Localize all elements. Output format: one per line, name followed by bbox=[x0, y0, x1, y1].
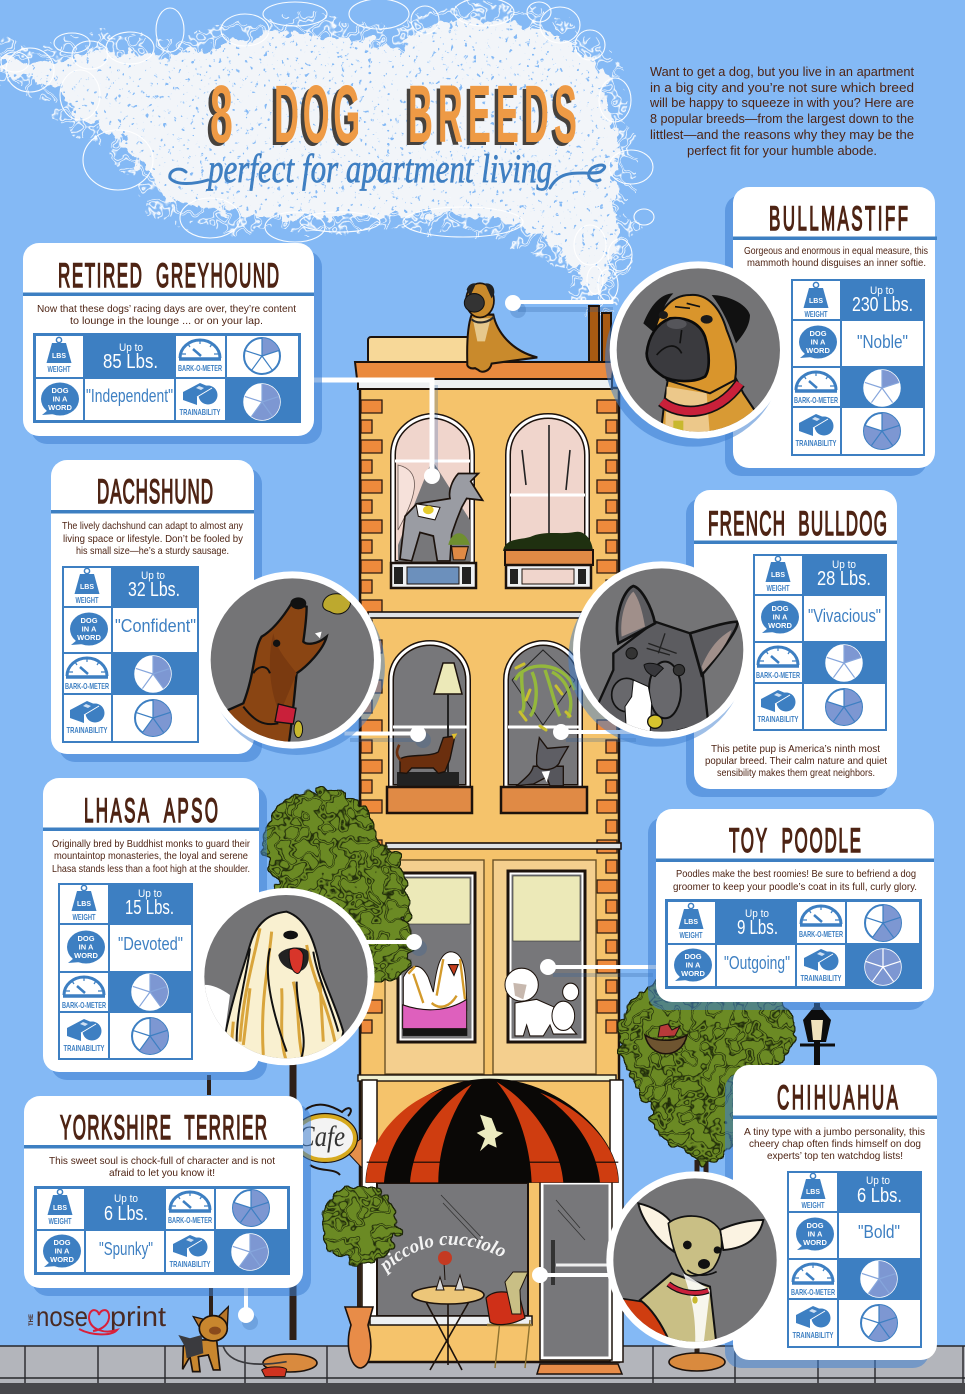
stats table bbox=[62, 566, 199, 743]
dog in a word: DOG bbox=[51, 386, 69, 395]
bark-o-meter bbox=[62, 977, 106, 1010]
heading: LHASA APSO bbox=[84, 792, 218, 830]
dog in a word: WORD bbox=[74, 951, 98, 960]
weight: LBS bbox=[80, 582, 94, 591]
word: "Devoted" bbox=[118, 934, 183, 954]
trainability pie bbox=[864, 413, 900, 449]
dog in a word bbox=[67, 930, 105, 964]
trainability pie bbox=[132, 1018, 168, 1054]
bark-o-meter: BARK-O-METER bbox=[168, 1215, 212, 1225]
up to bbox=[852, 285, 913, 316]
window: dachshund bbox=[387, 643, 472, 813]
trainability: TRAINABILITY bbox=[800, 973, 842, 983]
connector: bullmastiff bbox=[506, 296, 613, 318]
weight: LBS bbox=[771, 570, 785, 579]
weight: WEIGHT bbox=[48, 364, 71, 374]
bark pie bbox=[244, 338, 280, 374]
weight: WEIGHT bbox=[802, 1200, 825, 1210]
trainability pie bbox=[861, 1305, 897, 1341]
description: Lhasa stands less than a foot high at the shoulder. bbox=[52, 863, 250, 875]
shopfront: piccolo cucciolo bbox=[381, 1236, 505, 1276]
dog in a word: IN A bbox=[811, 338, 826, 346]
weight bbox=[678, 903, 704, 940]
bark pie bbox=[132, 974, 168, 1010]
up to bbox=[128, 570, 180, 601]
word: "Spunky" bbox=[99, 1239, 153, 1259]
logo: the nose print: nose bbox=[36, 1301, 88, 1332]
dog bowl bbox=[262, 1367, 287, 1377]
logo: the nose print: print bbox=[110, 1301, 166, 1332]
dog in a word: DOG bbox=[771, 604, 789, 613]
yorkshire terrier on sidewalk bbox=[178, 1307, 287, 1377]
description: The lively dachshund can adapt to almost any bbox=[62, 520, 244, 532]
stats table bbox=[753, 554, 887, 731]
up to bbox=[104, 1193, 148, 1225]
title: DOG bbox=[274, 69, 360, 160]
portrait: french bulldog bbox=[568, 560, 750, 747]
chair with chihuahua and red bag bbox=[486, 1272, 532, 1368]
roof parapet and chimneys bbox=[368, 306, 611, 363]
description: cheery chap often finds himself on dog bbox=[749, 1138, 921, 1150]
logo: the nose print bbox=[29, 1301, 166, 1334]
trainability bbox=[792, 1306, 834, 1340]
up to bbox=[817, 559, 871, 590]
trainability pie bbox=[865, 949, 901, 985]
weight: LBS bbox=[684, 917, 698, 926]
weight: WEIGHT bbox=[48, 1216, 72, 1226]
weight bbox=[800, 1173, 826, 1210]
heading: TOY POODLE bbox=[729, 822, 861, 860]
up to: Up to bbox=[141, 570, 165, 582]
intro text: perfect fit for your humble abode. bbox=[687, 143, 877, 158]
bark-o-meter bbox=[799, 906, 843, 939]
description bbox=[49, 1155, 275, 1179]
bark-o-meter: BARK-O-METER bbox=[799, 929, 843, 939]
cafe sign: Cafe bbox=[298, 1120, 345, 1153]
description: This sweet soul is chock-full of character and is not bbox=[49, 1155, 275, 1167]
description: Poodles make the best roomies! Be sure to befriend a dog bbox=[676, 868, 916, 880]
title: BREEDS bbox=[408, 69, 577, 160]
portrait: bullmastiff bbox=[605, 260, 790, 447]
tree trunks and poles bbox=[209, 1003, 817, 1365]
up to: Up to bbox=[138, 888, 162, 900]
bark-o-meter bbox=[794, 372, 838, 405]
connector: french bulldog bbox=[554, 724, 641, 742]
upper-floor panels bbox=[385, 860, 596, 1074]
shop door bbox=[540, 1181, 612, 1360]
description: mountaintop monasteries, the loyal and serene bbox=[54, 850, 248, 862]
description: living space or lifestyle. Don’t be fooled by bbox=[63, 533, 244, 545]
up to: Up to bbox=[119, 342, 143, 354]
dog in a word bbox=[761, 600, 799, 634]
intro text: littlest—and the reasons why they may be the bbox=[650, 127, 914, 142]
tree: left bbox=[264, 789, 414, 984]
portrait: chihuahua bbox=[606, 1171, 787, 1353]
description bbox=[705, 743, 887, 779]
trainability bbox=[800, 949, 842, 983]
stats table bbox=[665, 899, 922, 989]
weight: LBS bbox=[77, 899, 91, 908]
weight: LBS bbox=[806, 1187, 820, 1196]
up to: 32 Lbs. bbox=[128, 579, 180, 601]
trainability bbox=[170, 1235, 211, 1269]
weight: WEIGHT bbox=[804, 309, 828, 319]
bark-o-meter bbox=[791, 1264, 835, 1297]
dog in a word: DOG bbox=[684, 952, 702, 961]
description bbox=[744, 1126, 925, 1162]
weight: LBS bbox=[53, 1203, 67, 1212]
bark-o-meter: BARK-O-METER bbox=[791, 1287, 835, 1297]
dog in a word bbox=[43, 1234, 81, 1268]
dog in a word: IN A bbox=[808, 1230, 823, 1238]
intro text bbox=[649, 64, 914, 158]
bark pie bbox=[135, 656, 171, 692]
description: This petite pup is America’s ninth most bbox=[711, 743, 880, 755]
description: afraid to let you know it! bbox=[109, 1167, 215, 1179]
panel: retired greyhound bbox=[23, 243, 322, 444]
description: to lounge in the lounge ... or on your lap. bbox=[70, 315, 263, 327]
up to: 6 Lbs. bbox=[104, 1203, 148, 1225]
trainability bbox=[66, 701, 108, 735]
up to: 6 Lbs. bbox=[857, 1185, 902, 1207]
window: lhasa apso bbox=[398, 873, 475, 1042]
weight bbox=[804, 282, 828, 319]
up to bbox=[103, 342, 158, 373]
heading: YORKSHIRE TERRIER bbox=[60, 1109, 267, 1147]
description bbox=[37, 303, 296, 327]
dog in a word: DOG bbox=[806, 1221, 824, 1230]
dog in a word: IN A bbox=[55, 1246, 70, 1256]
description: groomer to keep your poodle’s coat in its full, curly glory. bbox=[673, 881, 917, 893]
dog in a word: WORD bbox=[803, 1238, 827, 1247]
panel: bullmastiff bbox=[725, 187, 937, 476]
bark-o-meter bbox=[756, 647, 800, 680]
dog in a word bbox=[70, 612, 108, 646]
bark-o-meter: BARK-O-METER bbox=[756, 670, 800, 680]
intro text: 8 popular breeds—from the largest down to the bbox=[650, 111, 914, 126]
heading: BULLMASTIFF bbox=[769, 200, 908, 238]
floor ledges bbox=[368, 612, 621, 849]
weight: WEIGHT bbox=[680, 930, 703, 940]
description: Now that these dogs’ racing days are over, they’re content bbox=[37, 303, 296, 315]
panel: yorkshire terrier bbox=[24, 1096, 311, 1296]
weight: WEIGHT bbox=[72, 912, 96, 922]
weight bbox=[48, 1189, 72, 1226]
up to: Up to bbox=[114, 1193, 138, 1205]
dog in a word: DOG bbox=[77, 934, 95, 943]
connector: chihuahua bbox=[532, 1268, 615, 1282]
intro text: in a big city and you’re not sure which breed bbox=[650, 80, 914, 95]
panel: dachshund bbox=[51, 460, 262, 762]
up to bbox=[737, 908, 778, 939]
up to: Up to bbox=[832, 559, 856, 571]
bark pie bbox=[826, 645, 862, 681]
word: "Vivacious" bbox=[808, 606, 881, 626]
up to: Up to bbox=[866, 1175, 890, 1187]
heading: FRENCH BULLDOG bbox=[708, 505, 887, 543]
connector: dachshund bbox=[345, 726, 431, 748]
description: Gorgeous and enormous in equal measure, this bbox=[744, 245, 928, 257]
up to: 28 Lbs. bbox=[817, 568, 871, 590]
panel: chihuahua bbox=[725, 1065, 937, 1368]
dog in a word: IN A bbox=[82, 624, 97, 634]
dog in a word bbox=[674, 948, 712, 982]
dachshund in window bbox=[397, 733, 457, 773]
weight bbox=[766, 556, 790, 593]
shop window bbox=[377, 1183, 528, 1316]
connector: toy poodle bbox=[540, 960, 658, 977]
up to: 15 Lbs. bbox=[125, 897, 174, 919]
word: "Independent" bbox=[86, 386, 173, 406]
weight bbox=[72, 885, 96, 922]
stats table bbox=[58, 883, 193, 1060]
description bbox=[744, 245, 928, 269]
dog in a word: IN A bbox=[53, 394, 68, 404]
striped awning bbox=[366, 1079, 618, 1182]
up to: Up to bbox=[870, 285, 894, 297]
weight bbox=[74, 568, 100, 605]
bark pie bbox=[233, 1190, 269, 1226]
bark-o-meter: BARK-O-METER bbox=[62, 1000, 106, 1010]
connector: lhasa apso bbox=[360, 934, 427, 956]
trainability bbox=[758, 690, 799, 724]
up to bbox=[857, 1175, 902, 1207]
bark-o-meter bbox=[178, 340, 222, 373]
description: his small size—he’s a sturdy sausage. bbox=[76, 545, 229, 557]
cafe table bbox=[412, 1251, 484, 1370]
weight: LBS bbox=[809, 296, 823, 305]
word: "Bold" bbox=[858, 1222, 900, 1242]
stats table bbox=[791, 279, 925, 456]
dog in a word: WORD bbox=[48, 403, 72, 412]
weight: LBS bbox=[52, 351, 66, 360]
window: greyhound bbox=[391, 416, 476, 588]
trainability: TRAINABILITY bbox=[64, 1043, 105, 1053]
bark pie bbox=[861, 1261, 897, 1297]
sidewalk bbox=[0, 1346, 965, 1394]
description: A tiny type with a jumbo personality, this bbox=[744, 1126, 925, 1138]
tree base planters bbox=[263, 1353, 725, 1372]
word: "Outgoing" bbox=[724, 953, 790, 973]
bark-o-meter: BARK-O-METER bbox=[65, 681, 109, 691]
roof cornice bbox=[355, 362, 614, 389]
stats table bbox=[34, 1186, 290, 1275]
description: mammoth hound disguises an inner softie. bbox=[747, 257, 926, 269]
heading: RETIRED GREYHOUND bbox=[58, 257, 279, 295]
bark-o-meter: BARK-O-METER bbox=[794, 395, 838, 405]
apartment building bbox=[354, 305, 624, 1375]
bark-o-meter bbox=[65, 658, 109, 691]
dog in a word: IN A bbox=[773, 612, 788, 622]
subtitle: perfect for apartment living bbox=[206, 146, 552, 191]
trainability: TRAINABILITY bbox=[758, 714, 799, 724]
weight: WEIGHT bbox=[766, 583, 790, 593]
topiary and pot bbox=[322, 1187, 398, 1368]
poodle in window bbox=[505, 968, 579, 1036]
up to: 230 Lbs. bbox=[852, 294, 913, 316]
dog in a word: WORD bbox=[806, 346, 830, 355]
trainability: TRAINABILITY bbox=[796, 438, 837, 448]
french bulldog in window bbox=[517, 738, 568, 786]
dog in a word: WORD bbox=[681, 969, 705, 978]
dog in a word bbox=[799, 326, 837, 358]
bark-o-meter: BARK-O-METER bbox=[178, 363, 222, 373]
weight bbox=[46, 337, 72, 374]
intro text: will be happy to squeeze in with you? Here are bbox=[649, 95, 914, 110]
title: 8 bbox=[210, 67, 233, 160]
description: sensibility makes them great neighbors. bbox=[717, 767, 875, 779]
cream ledge bbox=[358, 1075, 616, 1081]
bark pie bbox=[865, 905, 901, 941]
dog in a word: DOG bbox=[80, 616, 98, 625]
up to: 85 Lbs. bbox=[103, 351, 158, 373]
word: "Confident" bbox=[115, 616, 196, 636]
shopfront bbox=[361, 1079, 624, 1375]
portrait: dachshund bbox=[204, 571, 385, 755]
building wall bbox=[360, 388, 619, 1362]
dog in a word: IN A bbox=[79, 942, 94, 952]
window: toy poodle bbox=[508, 871, 585, 1042]
dog in a word: WORD bbox=[50, 1255, 74, 1264]
up to bbox=[125, 888, 174, 919]
street lamp bbox=[800, 1003, 835, 1045]
weight: WEIGHT bbox=[76, 595, 99, 605]
scribble cloud of smoke bbox=[0, 0, 654, 301]
trainability: TRAINABILITY bbox=[180, 407, 221, 417]
bullmastiff on roof bbox=[464, 283, 537, 372]
panel: french bulldog bbox=[686, 490, 897, 797]
window: hanging plant bbox=[501, 643, 587, 813]
title bbox=[210, 67, 577, 160]
trainability bbox=[64, 1019, 105, 1053]
word: "Noble" bbox=[857, 332, 908, 352]
description bbox=[52, 838, 250, 875]
heading: DACHSHUND bbox=[97, 473, 213, 511]
trainability: TRAINABILITY bbox=[170, 1259, 211, 1269]
up to: 9 Lbs. bbox=[737, 917, 778, 939]
trainability bbox=[180, 383, 221, 417]
shop name bbox=[386, 1245, 515, 1272]
dog in a word bbox=[41, 382, 79, 416]
trainability pie bbox=[135, 700, 171, 736]
connector: greyhound bbox=[312, 380, 440, 484]
cafe sign bbox=[292, 1105, 362, 1175]
door mat bbox=[537, 1364, 622, 1374]
stats table bbox=[33, 333, 301, 423]
dog in a word: DOG bbox=[809, 329, 827, 338]
description: experts’ top ten watchdog lists! bbox=[767, 1150, 903, 1162]
portrait: lhasa apso bbox=[197, 888, 377, 1068]
side bricks bbox=[361, 400, 617, 1033]
description bbox=[673, 868, 917, 893]
trainability pie bbox=[826, 689, 862, 725]
tree: right with nest bbox=[620, 969, 793, 1162]
trainability pie bbox=[232, 1234, 268, 1270]
description bbox=[62, 520, 244, 557]
intro text: Want to get a dog, but you live in an apartment bbox=[650, 64, 914, 79]
greyhound in window bbox=[400, 473, 483, 561]
dog in a word: WORD bbox=[768, 621, 792, 630]
window: planter bbox=[503, 416, 593, 588]
bark-o-meter bbox=[168, 1192, 212, 1225]
dog in a word: DOG bbox=[53, 1238, 71, 1247]
dog in a word: WORD bbox=[77, 633, 101, 642]
panel: toy poodle bbox=[648, 809, 934, 1010]
logo: the nose print: THE bbox=[29, 1314, 35, 1326]
dog in a word: IN A bbox=[686, 960, 701, 970]
trainability pie bbox=[244, 384, 280, 420]
connector: yorkshire terrier bbox=[238, 1285, 258, 1330]
trainability: TRAINABILITY bbox=[792, 1330, 834, 1340]
stats table bbox=[787, 1171, 922, 1348]
trainability bbox=[796, 414, 837, 448]
dog in a word bbox=[796, 1218, 834, 1250]
bird nest bbox=[645, 1024, 687, 1054]
panel: lhasa apso bbox=[43, 778, 267, 1080]
bark pie bbox=[864, 370, 900, 406]
trainability: TRAINABILITY bbox=[66, 725, 108, 735]
description: popular breed. Their calm nature and quiet bbox=[705, 755, 887, 767]
up to: Up to bbox=[745, 908, 769, 920]
heading: CHIHUAHUA bbox=[777, 1079, 898, 1117]
description: Originally bred by Buddhist monks to guard their bbox=[52, 838, 250, 850]
